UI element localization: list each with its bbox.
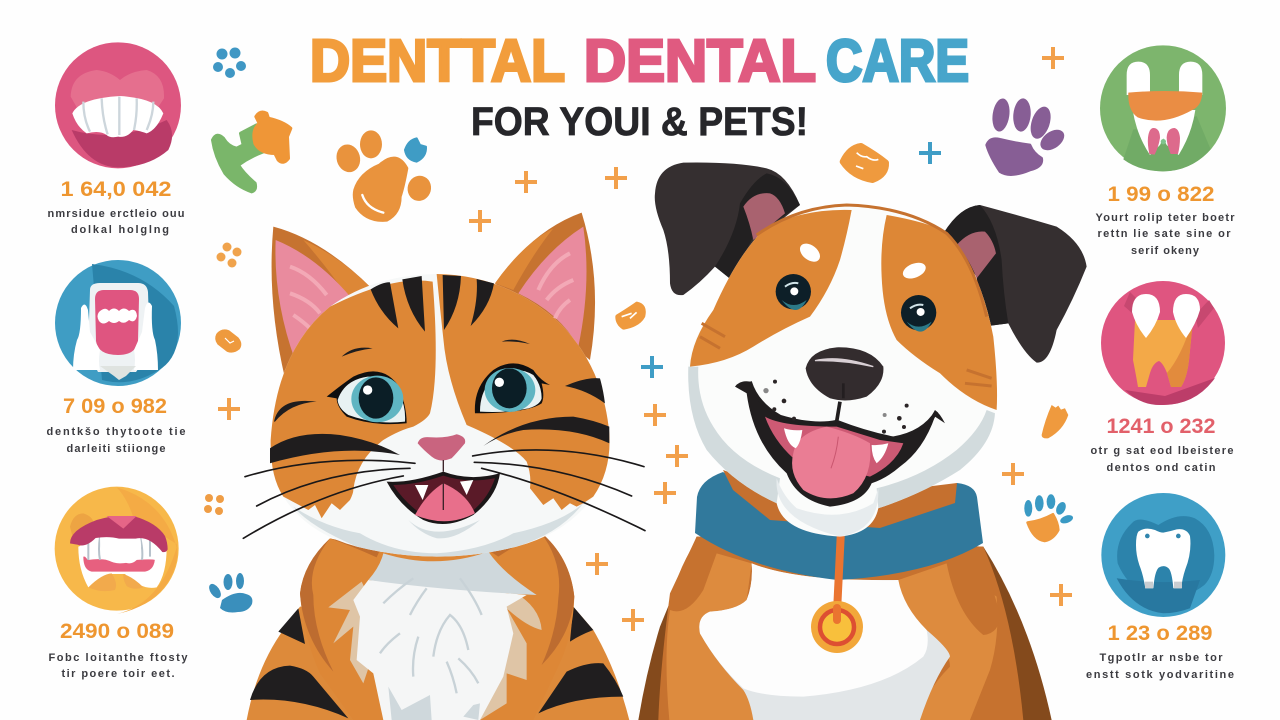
panel: right stat 2 (1090, 281, 1234, 474)
description: Yourt rolip teter boetr (1096, 212, 1235, 224)
number: 1 23 o 289 (1108, 622, 1212, 645)
icon: orange bean left (217, 331, 239, 351)
illustration: cat (243, 213, 645, 720)
cat face white (271, 274, 610, 557)
description: Fobc loitanthe ftosty (48, 652, 188, 664)
cat head (243, 274, 645, 557)
cat whiskers (243, 450, 645, 538)
dog chin (776, 478, 878, 537)
cat nose (418, 434, 465, 460)
dog right ear (943, 205, 1087, 363)
dog tag string (837, 530, 841, 612)
dog mouth (735, 381, 945, 507)
panel: right stat 3 (1086, 493, 1234, 681)
dog patch left (690, 210, 852, 367)
cat mouth (387, 460, 500, 538)
icon: blue mouth (55, 260, 181, 386)
dog left ear (655, 163, 800, 295)
cat chin shading (293, 503, 583, 557)
cat left ear (272, 227, 372, 378)
icon: green tooth (1100, 45, 1226, 171)
panel: left stat 2 (46, 260, 186, 455)
dog nose (806, 347, 883, 400)
panel: right stat 1 (1096, 45, 1235, 257)
cat right eye (475, 363, 550, 413)
number: 1241 o 232 (1106, 415, 1216, 438)
subtitle: FOR YOUI & PETS! (471, 100, 808, 144)
cat chest fur (353, 580, 527, 720)
decoration: dots and small paws (204, 47, 1074, 631)
icon: blue paw left (207, 573, 252, 612)
dog patch right (881, 215, 997, 410)
icon: purple paw (987, 97, 1068, 175)
icon: blue dots (213, 48, 246, 78)
panel: right stat 1: rettn lie sate sine or (1098, 228, 1231, 240)
cat face orange right (437, 274, 610, 510)
dog freckles (763, 380, 909, 434)
icon: yellow mouth (55, 487, 179, 614)
cat body (247, 532, 629, 720)
icon: blue and orange paw right (1024, 494, 1074, 541)
description: dentkšo thytoote tie (46, 426, 186, 438)
dog face white (688, 205, 996, 537)
cat left eye (327, 371, 407, 424)
icon: orange bean mid (618, 304, 643, 327)
panel: right stat 3: enstt sotk yodvaritine (1086, 669, 1234, 681)
illustration: dog (638, 163, 1087, 720)
icon: orange dots upper (216, 242, 242, 268)
dog neck (723, 470, 957, 528)
panel: right stat 2: dentos ond catin (1106, 462, 1216, 474)
cat chest collar shade (368, 552, 537, 595)
dog head top edge (757, 205, 987, 317)
dog eyes (776, 274, 936, 332)
icon: plus signs (218, 47, 1072, 631)
panel: right stat 1: serif okeny (1131, 245, 1200, 257)
dog tag (811, 601, 863, 653)
number: 2490 o 089 (60, 620, 174, 643)
panel: left stat 1 (48, 42, 184, 236)
title: CARE (826, 28, 969, 94)
icon: pink tooth (1101, 281, 1225, 405)
panel: left stat 2: darleiti stiionge (66, 443, 166, 455)
number: 1 99 o 822 (1108, 183, 1214, 206)
icon: green and orange splat (213, 112, 291, 192)
title: DENTAL (584, 28, 816, 94)
icon: orange dots lower (204, 494, 224, 515)
description: otr g sat eod lbeistere (1090, 445, 1234, 457)
dog collar (695, 472, 983, 580)
title (310, 28, 969, 94)
icon: pink teeth (55, 42, 181, 168)
icon: small orange paw (1042, 405, 1068, 438)
cat face orange left (271, 280, 436, 518)
description: nmrsidue erctleio ouu (48, 208, 184, 220)
cat chest wisps (328, 582, 542, 720)
dog head (688, 205, 997, 537)
icon: blue tooth (1101, 493, 1225, 617)
panel: left stat 1: dolkal holglng (71, 224, 169, 236)
description: Tgpotlr ar nsbe tor (1100, 652, 1223, 664)
cat stripes (270, 275, 609, 463)
dog face shadow (688, 367, 995, 508)
panel: left stat 3 (48, 487, 188, 680)
icon: orange bean top (843, 146, 886, 180)
dog body (638, 537, 1052, 720)
dog head spots (797, 240, 823, 265)
icon: orange paw (333, 130, 434, 220)
panel: left stat 3: tir poere toir eet. (62, 668, 174, 680)
number: 1 64,0 042 (60, 178, 172, 201)
title: DENTTAL (310, 28, 565, 94)
cat right ear (495, 213, 595, 360)
number: 7 09 o 982 (63, 395, 167, 418)
